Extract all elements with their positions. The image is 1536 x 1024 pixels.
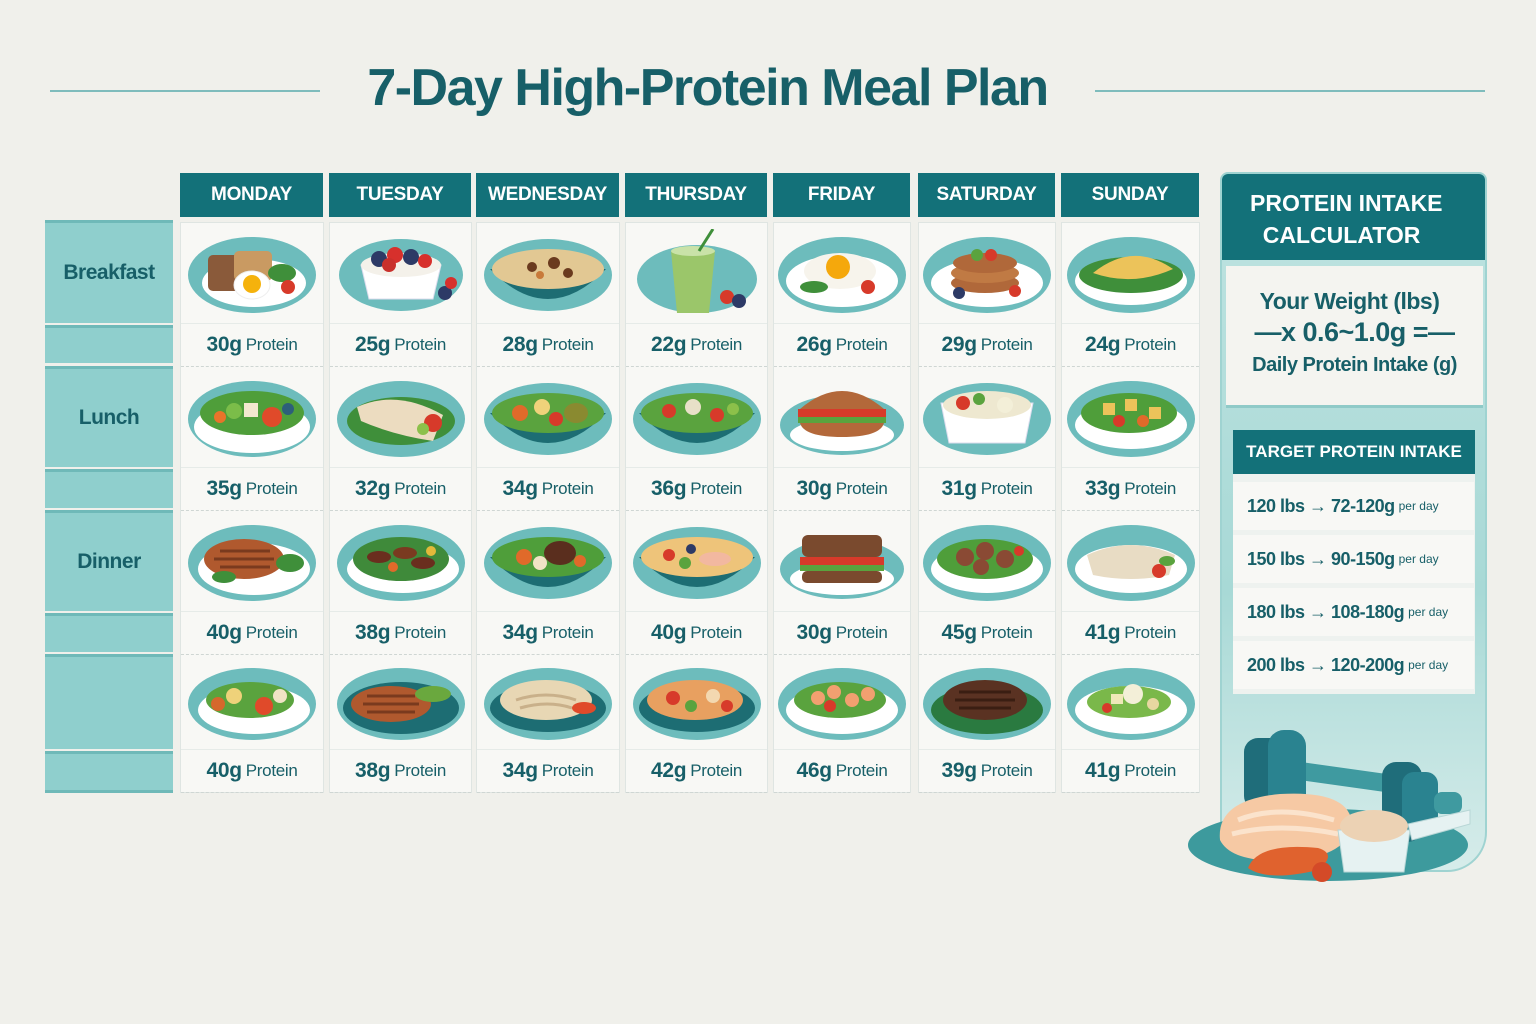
target protein intake table: 120 lbs → 72-120g [1247, 496, 1395, 516]
column: Saturday: Protein [981, 623, 1033, 642]
column: Wednesday: Protein [542, 761, 594, 780]
target protein intake table [1233, 430, 1475, 694]
column: Tuesday: Protein [394, 761, 446, 780]
column: Friday [773, 222, 911, 793]
title: 7-Day High-Protein Meal Plan [367, 59, 1048, 117]
column: Wednesday: 34g [502, 621, 538, 644]
column: Saturday: 29g [941, 333, 977, 356]
column: Friday: 26g [796, 333, 832, 356]
column: Monday: 30g [206, 333, 242, 356]
column: Wednesday: Protein [542, 335, 594, 354]
row labels: Lunch [79, 406, 139, 429]
column: Friday: Protein [836, 479, 888, 498]
column: Tuesday: 38g [355, 621, 390, 644]
formula box: —x 0.6~1.0g =— [1254, 317, 1455, 347]
day headers: THURSDAY [645, 184, 747, 205]
column: Thursday: Protein [690, 623, 742, 642]
target protein intake table: per day [1399, 499, 1439, 513]
day headers: WEDNESDAY [488, 184, 607, 205]
column: Friday: Protein [836, 335, 888, 354]
row labels: Dinner [77, 550, 141, 573]
column: Monday: 35g [206, 477, 242, 500]
column: Friday: 30g [796, 477, 832, 500]
column: Thursday [625, 222, 768, 793]
row labels: Breakfast [63, 261, 155, 284]
column: Sunday: 24g [1085, 333, 1120, 356]
column: Monday: Protein [246, 623, 298, 642]
column: Tuesday: Protein [394, 335, 446, 354]
column: Sunday: Protein [1124, 335, 1176, 354]
column: Friday: 46g [796, 759, 832, 782]
day headers: SUNDAY [1092, 184, 1168, 205]
column: Monday: Protein [246, 335, 298, 354]
column: Tuesday: 32g [355, 477, 390, 500]
column: Sunday: Protein [1124, 623, 1176, 642]
illustration: dumbbell, chicken and protein scoop [1188, 730, 1470, 882]
calculator header [1222, 174, 1487, 260]
column: Saturday: Protein [981, 479, 1033, 498]
row labels [45, 220, 173, 793]
column: Thursday: 22g [651, 333, 686, 356]
column: Monday: 40g [206, 759, 242, 782]
column: Monday [180, 222, 324, 793]
column: Friday: 30g [796, 621, 832, 644]
column: Wednesday: Protein [542, 623, 594, 642]
column: Sunday: Protein [1124, 761, 1176, 780]
formula box: Your Weight (lbs) [1260, 288, 1439, 314]
column: Saturday [918, 222, 1056, 793]
day headers: TUESDAY [357, 184, 443, 205]
day headers: MONDAY [211, 184, 292, 205]
column: Wednesday: 28g [502, 333, 538, 356]
column: Monday: Protein [246, 479, 298, 498]
column: Friday: Protein [836, 761, 888, 780]
column: Thursday: 40g [651, 621, 686, 644]
target protein intake table: per day [1399, 552, 1439, 566]
column: Wednesday: 34g [502, 477, 538, 500]
target protein intake table: 200 lbs → 120-200g [1247, 654, 1404, 674]
day headers [180, 173, 1199, 217]
calculator header: CALCULATOR [1263, 222, 1420, 248]
column: Saturday: 45g [941, 621, 977, 644]
column: Tuesday: Protein [394, 479, 446, 498]
column: Saturday: 31g [941, 477, 977, 500]
column: Saturday: Protein [981, 761, 1033, 780]
formula box: Daily Protein Intake (g) [1252, 354, 1457, 376]
column: Thursday: Protein [690, 335, 742, 354]
day headers: FRIDAY [808, 184, 875, 205]
column: Friday: Protein [836, 623, 888, 642]
column: Sunday: 41g [1085, 621, 1120, 644]
target protein intake table: per day [1408, 605, 1448, 619]
formula box [1226, 266, 1483, 408]
column: Wednesday: Protein [542, 479, 594, 498]
target protein intake table: per day [1408, 658, 1448, 672]
column: Saturday: 39g [941, 759, 977, 782]
column: Tuesday: 25g [355, 333, 390, 356]
column: Wednesday: 34g [502, 759, 538, 782]
column: Monday: 40g [206, 621, 242, 644]
column: Sunday: 33g [1085, 477, 1120, 500]
column: Sunday: Protein [1124, 479, 1176, 498]
column: Tuesday [329, 222, 472, 793]
target protein intake table: TARGET PROTEIN INTAKE [1246, 442, 1462, 461]
target protein intake table: 180 lbs → 108-180g [1247, 602, 1404, 622]
column: Thursday: 42g [651, 759, 686, 782]
column: Sunday: 41g [1085, 759, 1120, 782]
target protein intake table: 150 lbs → 90-150g [1247, 548, 1395, 568]
column: Thursday: 36g [651, 477, 686, 500]
calculator header: PROTEIN INTAKE [1250, 190, 1443, 216]
column: Thursday: Protein [690, 479, 742, 498]
column: Tuesday: Protein [394, 623, 446, 642]
column: Sunday [1061, 222, 1200, 793]
column: Thursday: Protein [690, 761, 742, 780]
column: Saturday: Protein [981, 335, 1033, 354]
panel: protein intake calculator [1220, 172, 1487, 872]
column: Tuesday: 38g [355, 759, 390, 782]
column: Monday: Protein [246, 761, 298, 780]
day headers: SATURDAY [936, 184, 1036, 205]
column: Wednesday [476, 222, 620, 793]
